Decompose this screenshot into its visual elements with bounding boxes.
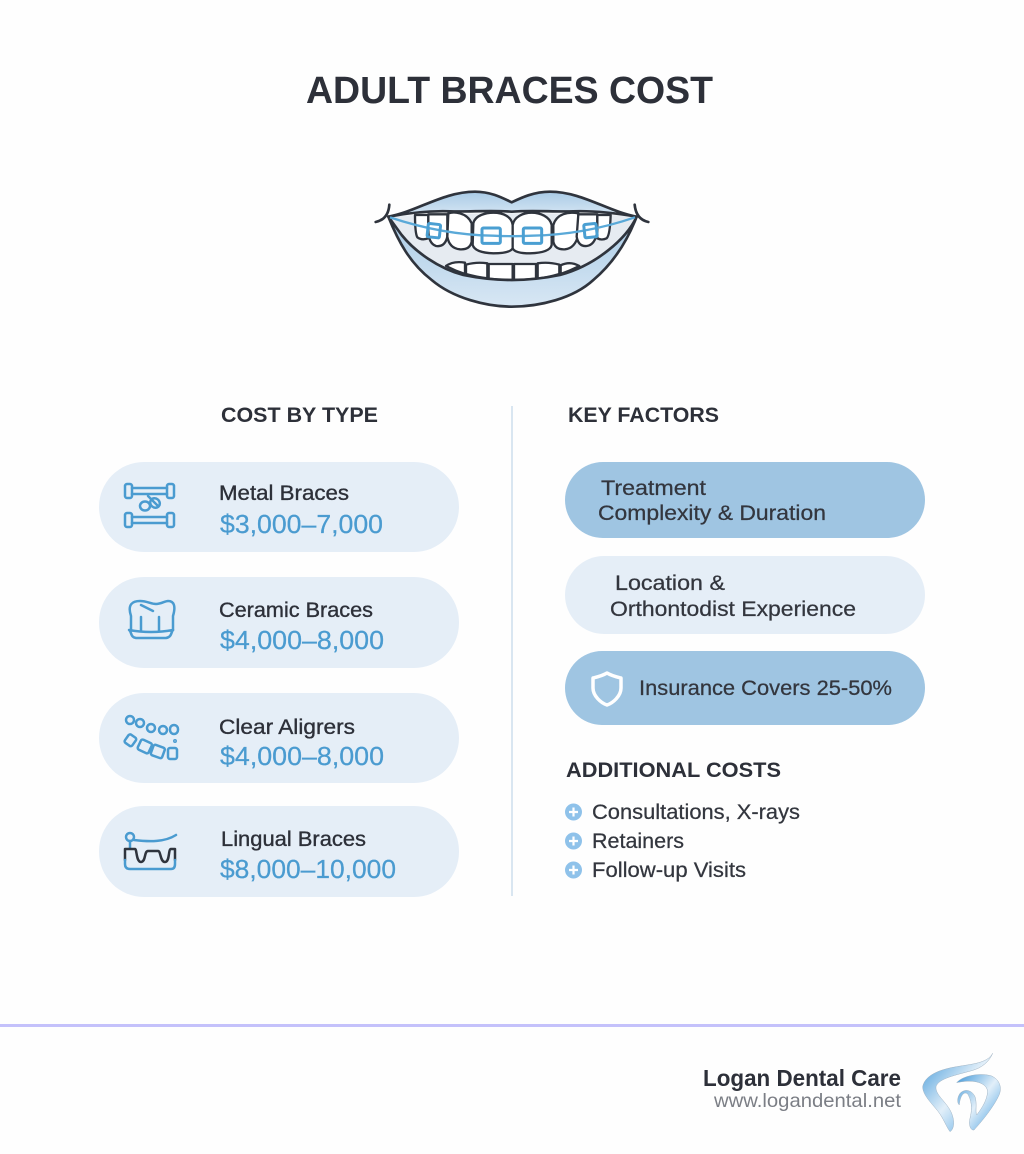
- upper lip: [388, 192, 637, 217]
- panel: lingual braces: $8,000–10,000: [220, 854, 396, 884]
- icon: lingual braces: [125, 833, 176, 869]
- mouth interior: [388, 213, 637, 280]
- lower teeth: [446, 262, 579, 280]
- panel: ceramic braces: [99, 577, 459, 668]
- panel: location and experience: Location &: [615, 572, 725, 595]
- panel: treatment complexity: Treatment: [601, 477, 706, 500]
- panel: insurance: Insurance Covers 25-50%: [639, 677, 892, 700]
- logo: tooth: [923, 1053, 1000, 1132]
- panel: metal braces: Metal Braces: [219, 482, 349, 505]
- panel: location and experience: Orthontodist Experience: [610, 598, 856, 621]
- panel: clear aligners: Clear Aligrers: [219, 716, 355, 739]
- panel: metal braces: [99, 462, 459, 552]
- icon: ceramic tooth: [129, 601, 174, 638]
- list: additional costs: [565, 801, 800, 882]
- heading: key factors: KEY FACTORS: [568, 404, 719, 427]
- icon: clear aligners: [124, 716, 178, 759]
- footer brand text: www.logandental.net: [713, 1090, 902, 1112]
- panel: insurance: [565, 651, 925, 725]
- archwire and brackets: [390, 217, 635, 243]
- title: ADULT BRACES COST: [306, 70, 713, 112]
- panel: treatment complexity: [565, 462, 925, 538]
- item: consultations: Consultations, X-rays: [592, 801, 800, 824]
- footer brand text: [703, 1065, 902, 1112]
- mouth corners: [376, 205, 648, 222]
- item: retainers: Retainers: [592, 830, 684, 853]
- lower lip: [388, 217, 637, 307]
- panel: metal braces: $3,000–7,000: [220, 509, 383, 539]
- icon: metal braces: [125, 484, 174, 527]
- panel: ceramic braces: Ceramic Braces: [219, 599, 373, 622]
- panel: clear aligners: $4,000–8,000: [220, 741, 384, 771]
- panel: location and experience: [565, 556, 925, 634]
- panel: ceramic braces: $4,000–8,000: [220, 625, 384, 655]
- icon: shield: [593, 673, 621, 705]
- panel: treatment complexity: Complexity & Duration: [598, 502, 826, 525]
- item: follow-up visits: Follow-up Visits: [592, 859, 746, 882]
- heading: cost by type: COST BY TYPE: [221, 404, 378, 427]
- panel: lingual braces: [99, 806, 459, 897]
- panel: clear aligners: [99, 693, 459, 783]
- upper teeth: [415, 213, 611, 253]
- heading: additional costs: ADDITIONAL COSTS: [566, 759, 781, 782]
- illustration: smile with braces: [376, 192, 648, 307]
- panel: lingual braces: Lingual Braces: [221, 828, 366, 851]
- footer brand text: Logan Dental Care: [703, 1065, 901, 1091]
